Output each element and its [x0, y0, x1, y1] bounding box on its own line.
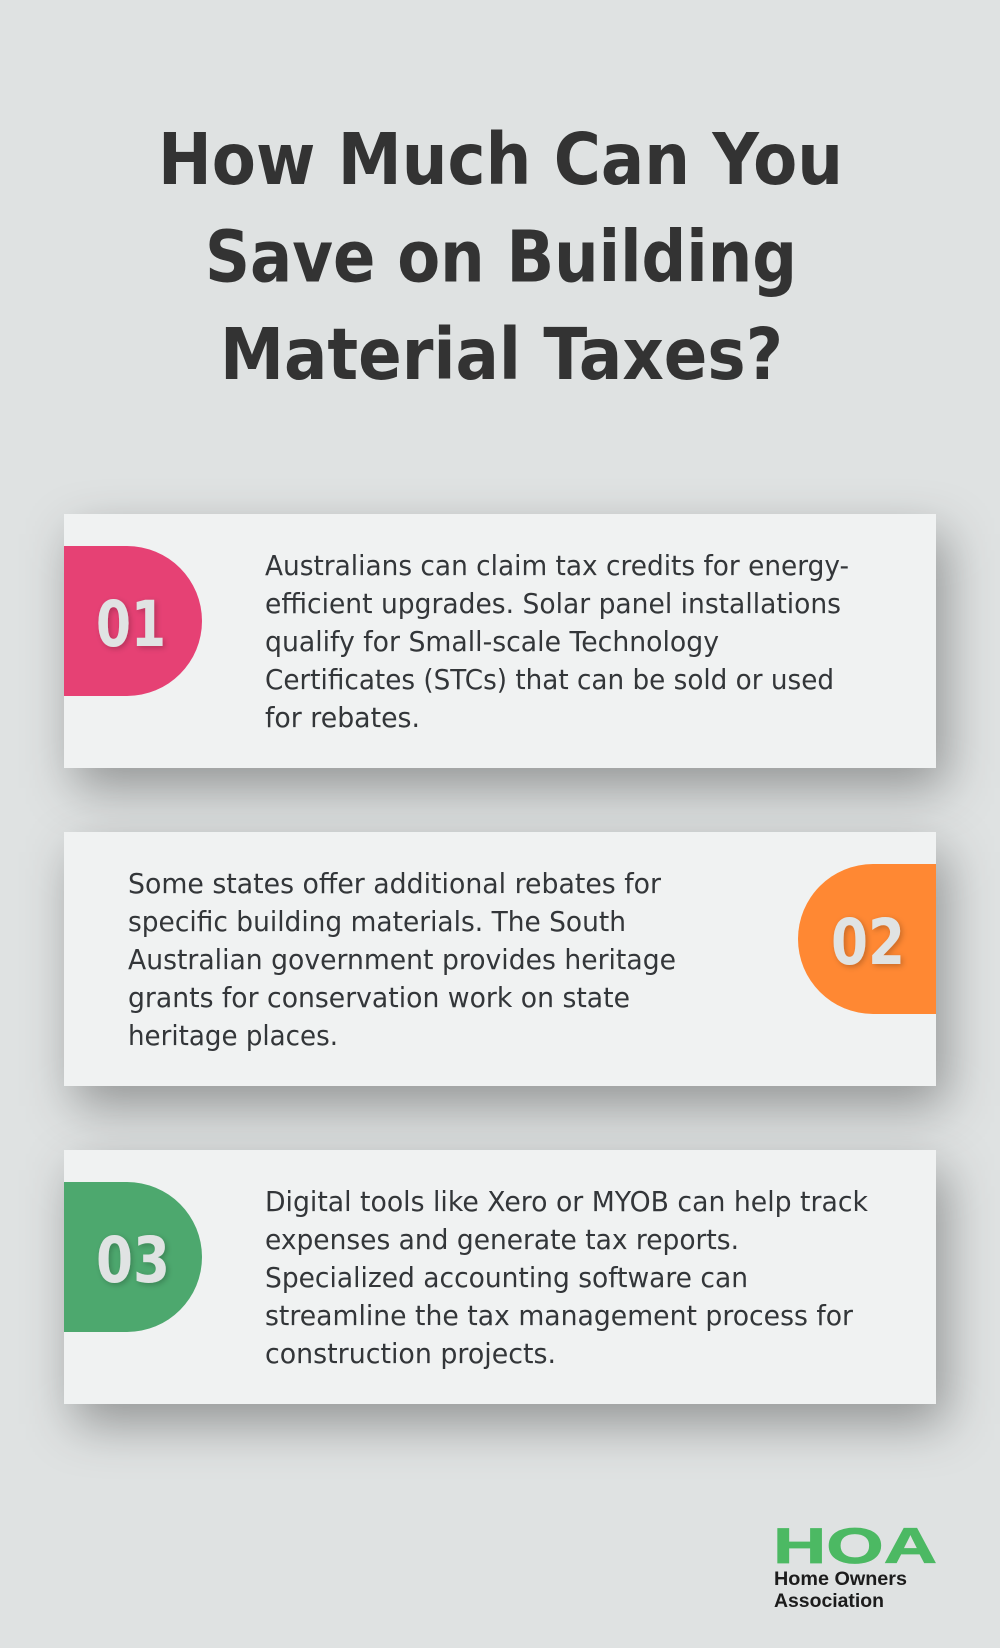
title	[158, 118, 843, 396]
logo: Home Owners Association: HOA	[773, 1518, 937, 1574]
badge 02	[798, 864, 936, 1014]
card 03 background	[64, 1150, 936, 1404]
card 01 shadow	[74, 534, 946, 788]
card 02 text: Australian government provides heritage	[128, 944, 676, 976]
badge 03	[64, 1182, 202, 1332]
card 02 background	[64, 832, 936, 1086]
card 01 text: qualify for Small-scale Technology	[265, 626, 719, 658]
title: Material Taxes?	[220, 313, 783, 396]
card 01 text: Certificates (STCs) that can be sold or used	[265, 664, 834, 696]
badge 01	[64, 546, 202, 696]
card 03 text: construction projects.	[265, 1338, 556, 1370]
card 01 text: for rebates.	[265, 702, 420, 734]
title: Save on Building	[205, 216, 797, 298]
logo: Home Owners Association: Association	[774, 1591, 884, 1612]
logo: Home Owners Association: Home Owners	[774, 1569, 907, 1590]
card 01 text: Australians can claim tax credits for energy-	[265, 550, 849, 582]
panel: card 03	[64, 1150, 946, 1424]
card 03 text: streamline the tax management process for	[265, 1300, 854, 1332]
panel: card 01	[64, 514, 946, 788]
panel: card 02	[64, 832, 946, 1106]
card 01 background	[64, 514, 936, 768]
card 02 text	[128, 868, 676, 1052]
card 03 text: Digital tools like Xero or MYOB can help track	[265, 1186, 868, 1218]
card 02 text: specific building materials. The South	[128, 906, 626, 938]
card 01 text	[265, 550, 849, 734]
card 03 shadow	[74, 1170, 946, 1424]
card 02 text: grants for conservation work on state	[128, 982, 630, 1014]
badge 03: 03	[96, 1224, 170, 1297]
card 03 text: expenses and generate tax reports.	[265, 1224, 739, 1256]
logo: Home Owners Association	[773, 1518, 937, 1612]
card 02 text: Some states offer additional rebates for	[128, 868, 662, 900]
card 03 text: Specialized accounting software can	[265, 1262, 748, 1294]
title: How Much Can You	[158, 118, 843, 201]
card 01 text: efficient upgrades. Solar panel installations	[265, 588, 841, 620]
card 02 shadow	[74, 852, 946, 1106]
badge 02: 02	[831, 906, 905, 979]
card 02 text: heritage places.	[128, 1020, 338, 1052]
card 03 text	[265, 1186, 868, 1370]
badge 01: 01	[96, 588, 166, 661]
